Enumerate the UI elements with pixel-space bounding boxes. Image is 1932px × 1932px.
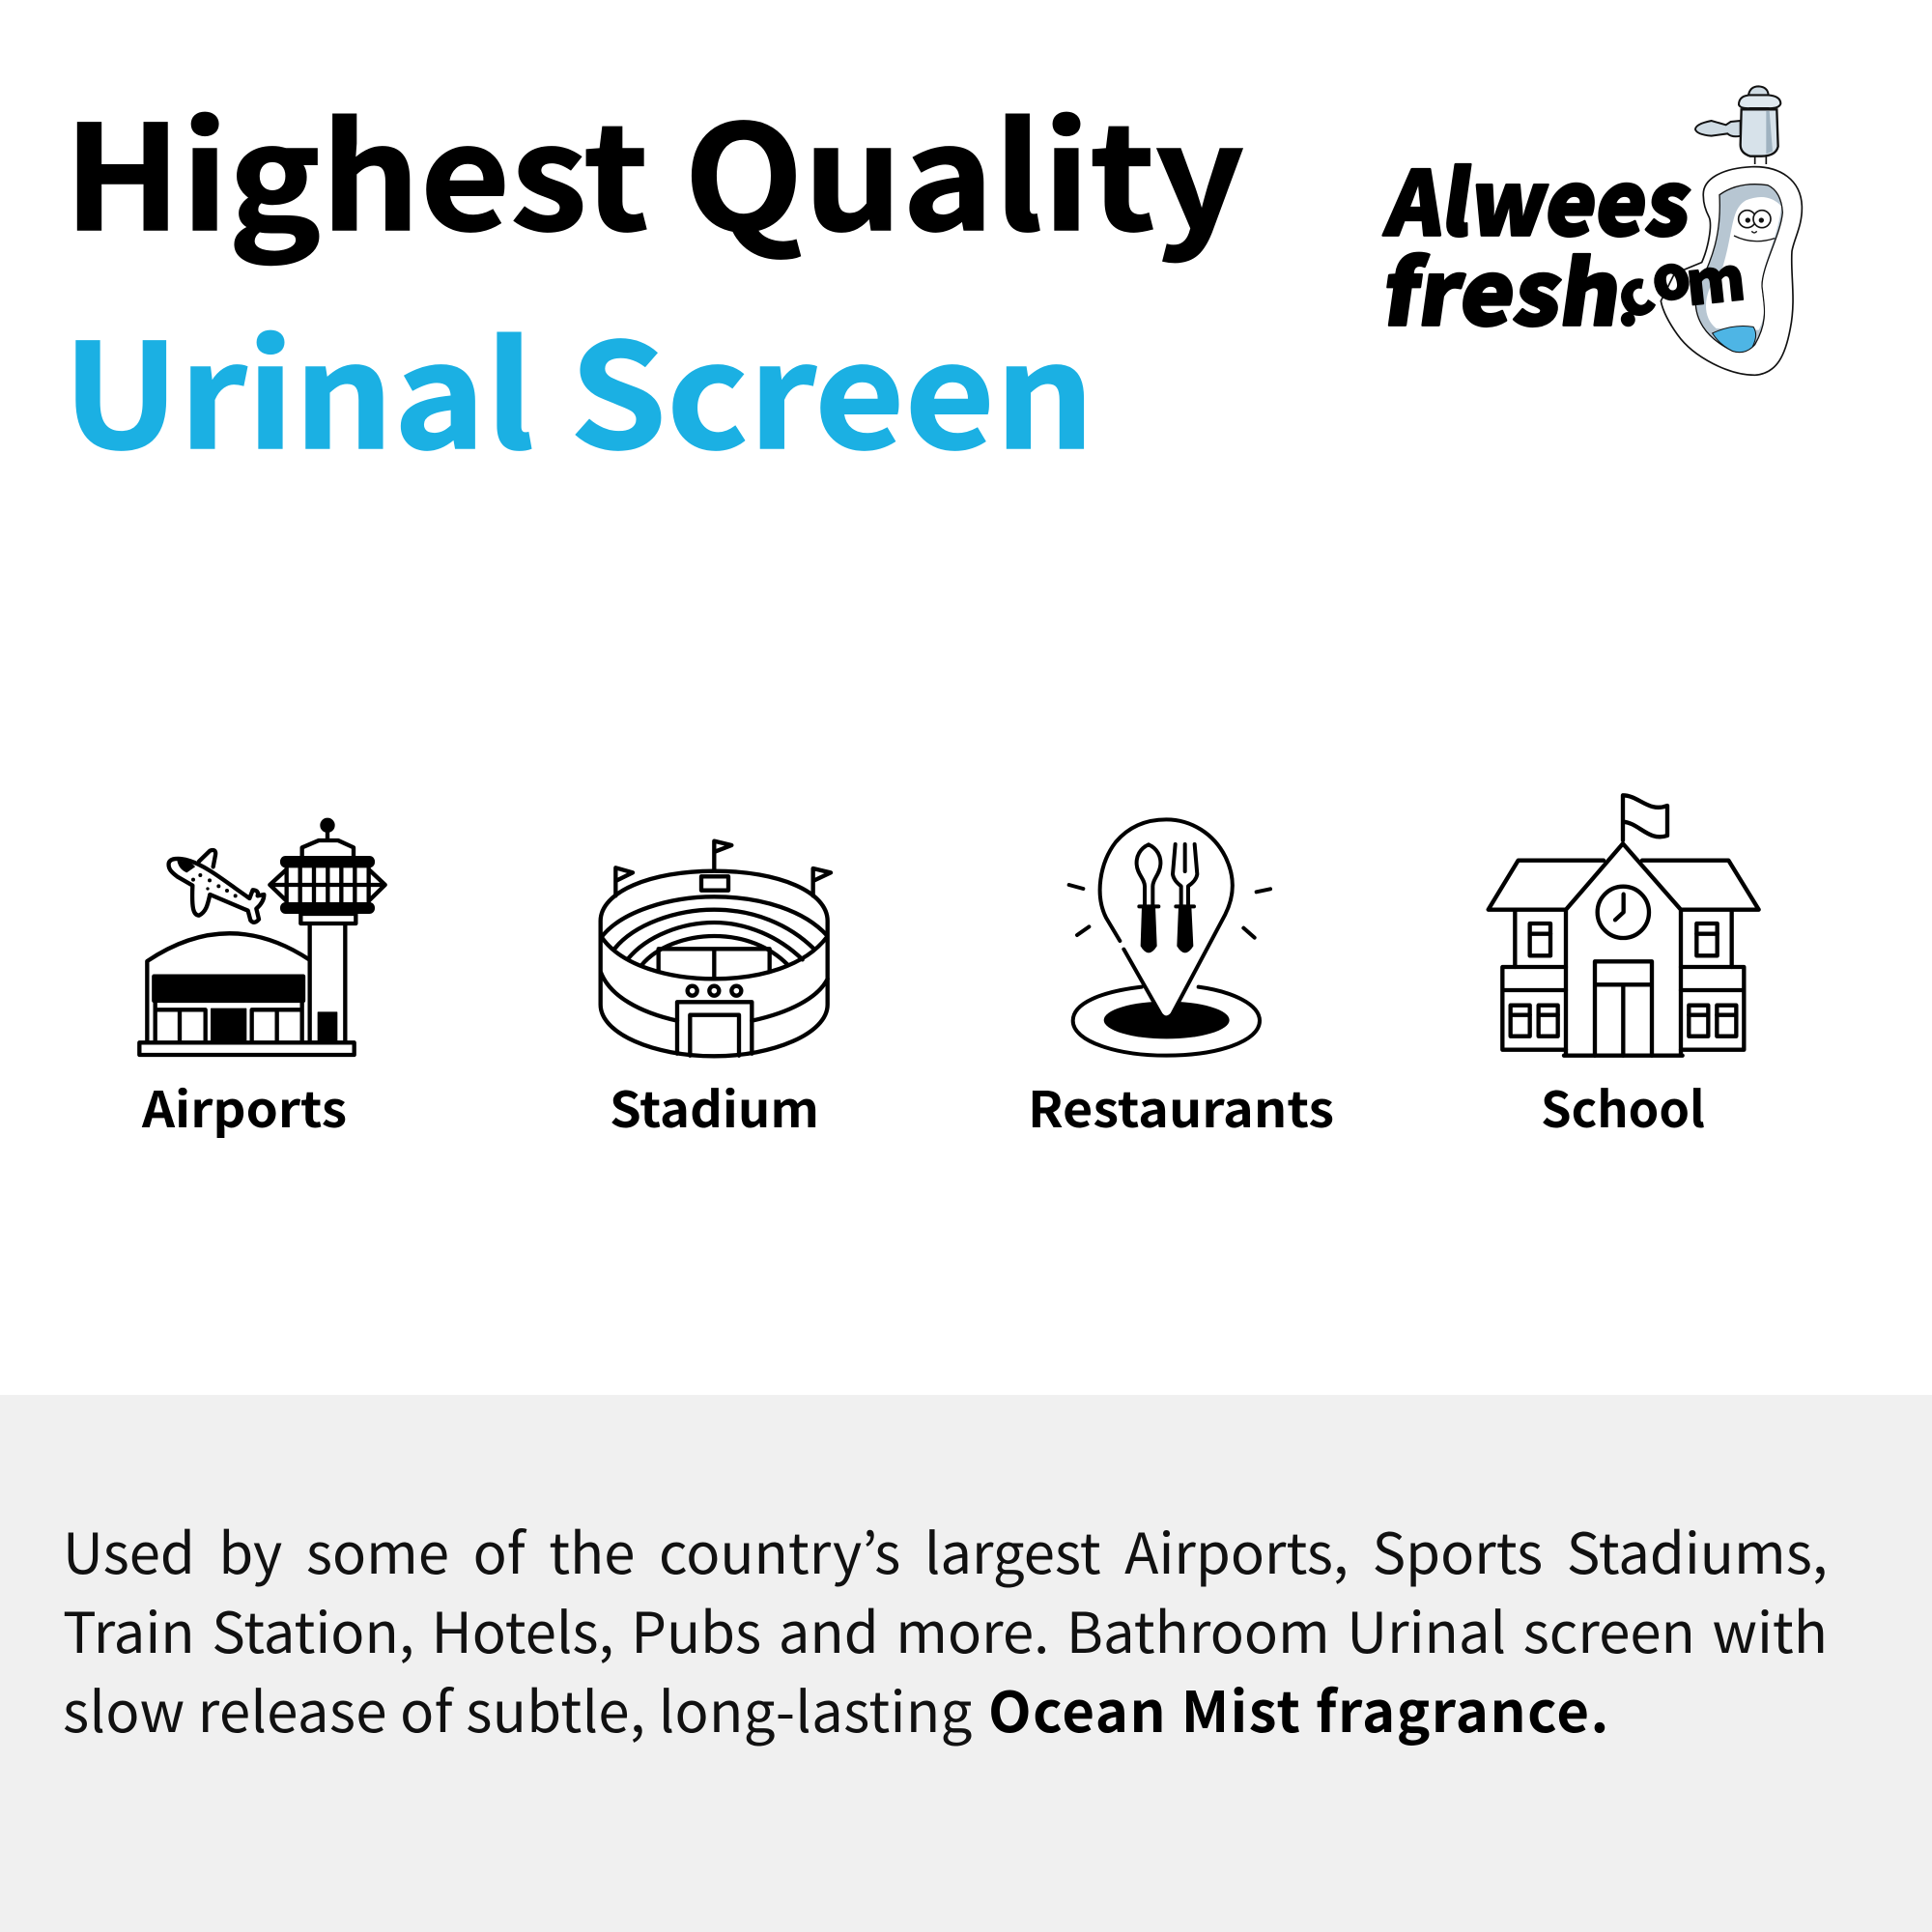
title: two-line heading	[63, 63, 1244, 491]
label: Airports: Airports	[141, 1070, 347, 1142]
icon labels	[141, 1070, 1705, 1142]
logo wordmark: .com	[1592, 226, 1748, 345]
logo wordmark: .com: o	[1639, 226, 1699, 320]
airplane	[169, 850, 264, 923]
icon: restaurant location pin	[1069, 819, 1270, 1056]
label: Stadium: Stadium	[610, 1070, 819, 1142]
grey panel: description background	[0, 1395, 1932, 1932]
logo mascot: urinal character	[1661, 86, 1802, 375]
icon: airport	[139, 818, 385, 1055]
logo wordmark: Alwees: Alwees	[1379, 132, 1701, 261]
text block: description: Train Station, Hotels, Pubs and more. Bathroom Urinal screen with	[63, 1588, 1828, 1669]
icon: stadium	[601, 841, 831, 1056]
logo wordmark: .com: c	[1600, 244, 1665, 336]
logo: Alwees fresh.com with urinal mascot	[1377, 86, 1802, 375]
text block: description: slow release of subtle, long-lasting Ocean Mist fragrance.	[63, 1667, 1610, 1748]
heading line: Highest Quality: Highest Quality	[64, 63, 1244, 272]
label: School: School	[1541, 1070, 1705, 1142]
label: Restaurants: Restaurants	[1028, 1070, 1334, 1142]
logo wordmark: .com: .	[1592, 257, 1647, 345]
text block: description: Used by some of the country’s largest Airports, Sports Stadiums,	[63, 1509, 1828, 1590]
logo wordmark: fresh: fresh	[1377, 222, 1632, 352]
text block: description	[63, 1509, 1828, 1748]
logo wordmark: .com: m	[1681, 230, 1748, 323]
heading line: Urinal Screen: Urinal Screen	[63, 281, 1094, 491]
icon: school	[1489, 795, 1759, 1056]
